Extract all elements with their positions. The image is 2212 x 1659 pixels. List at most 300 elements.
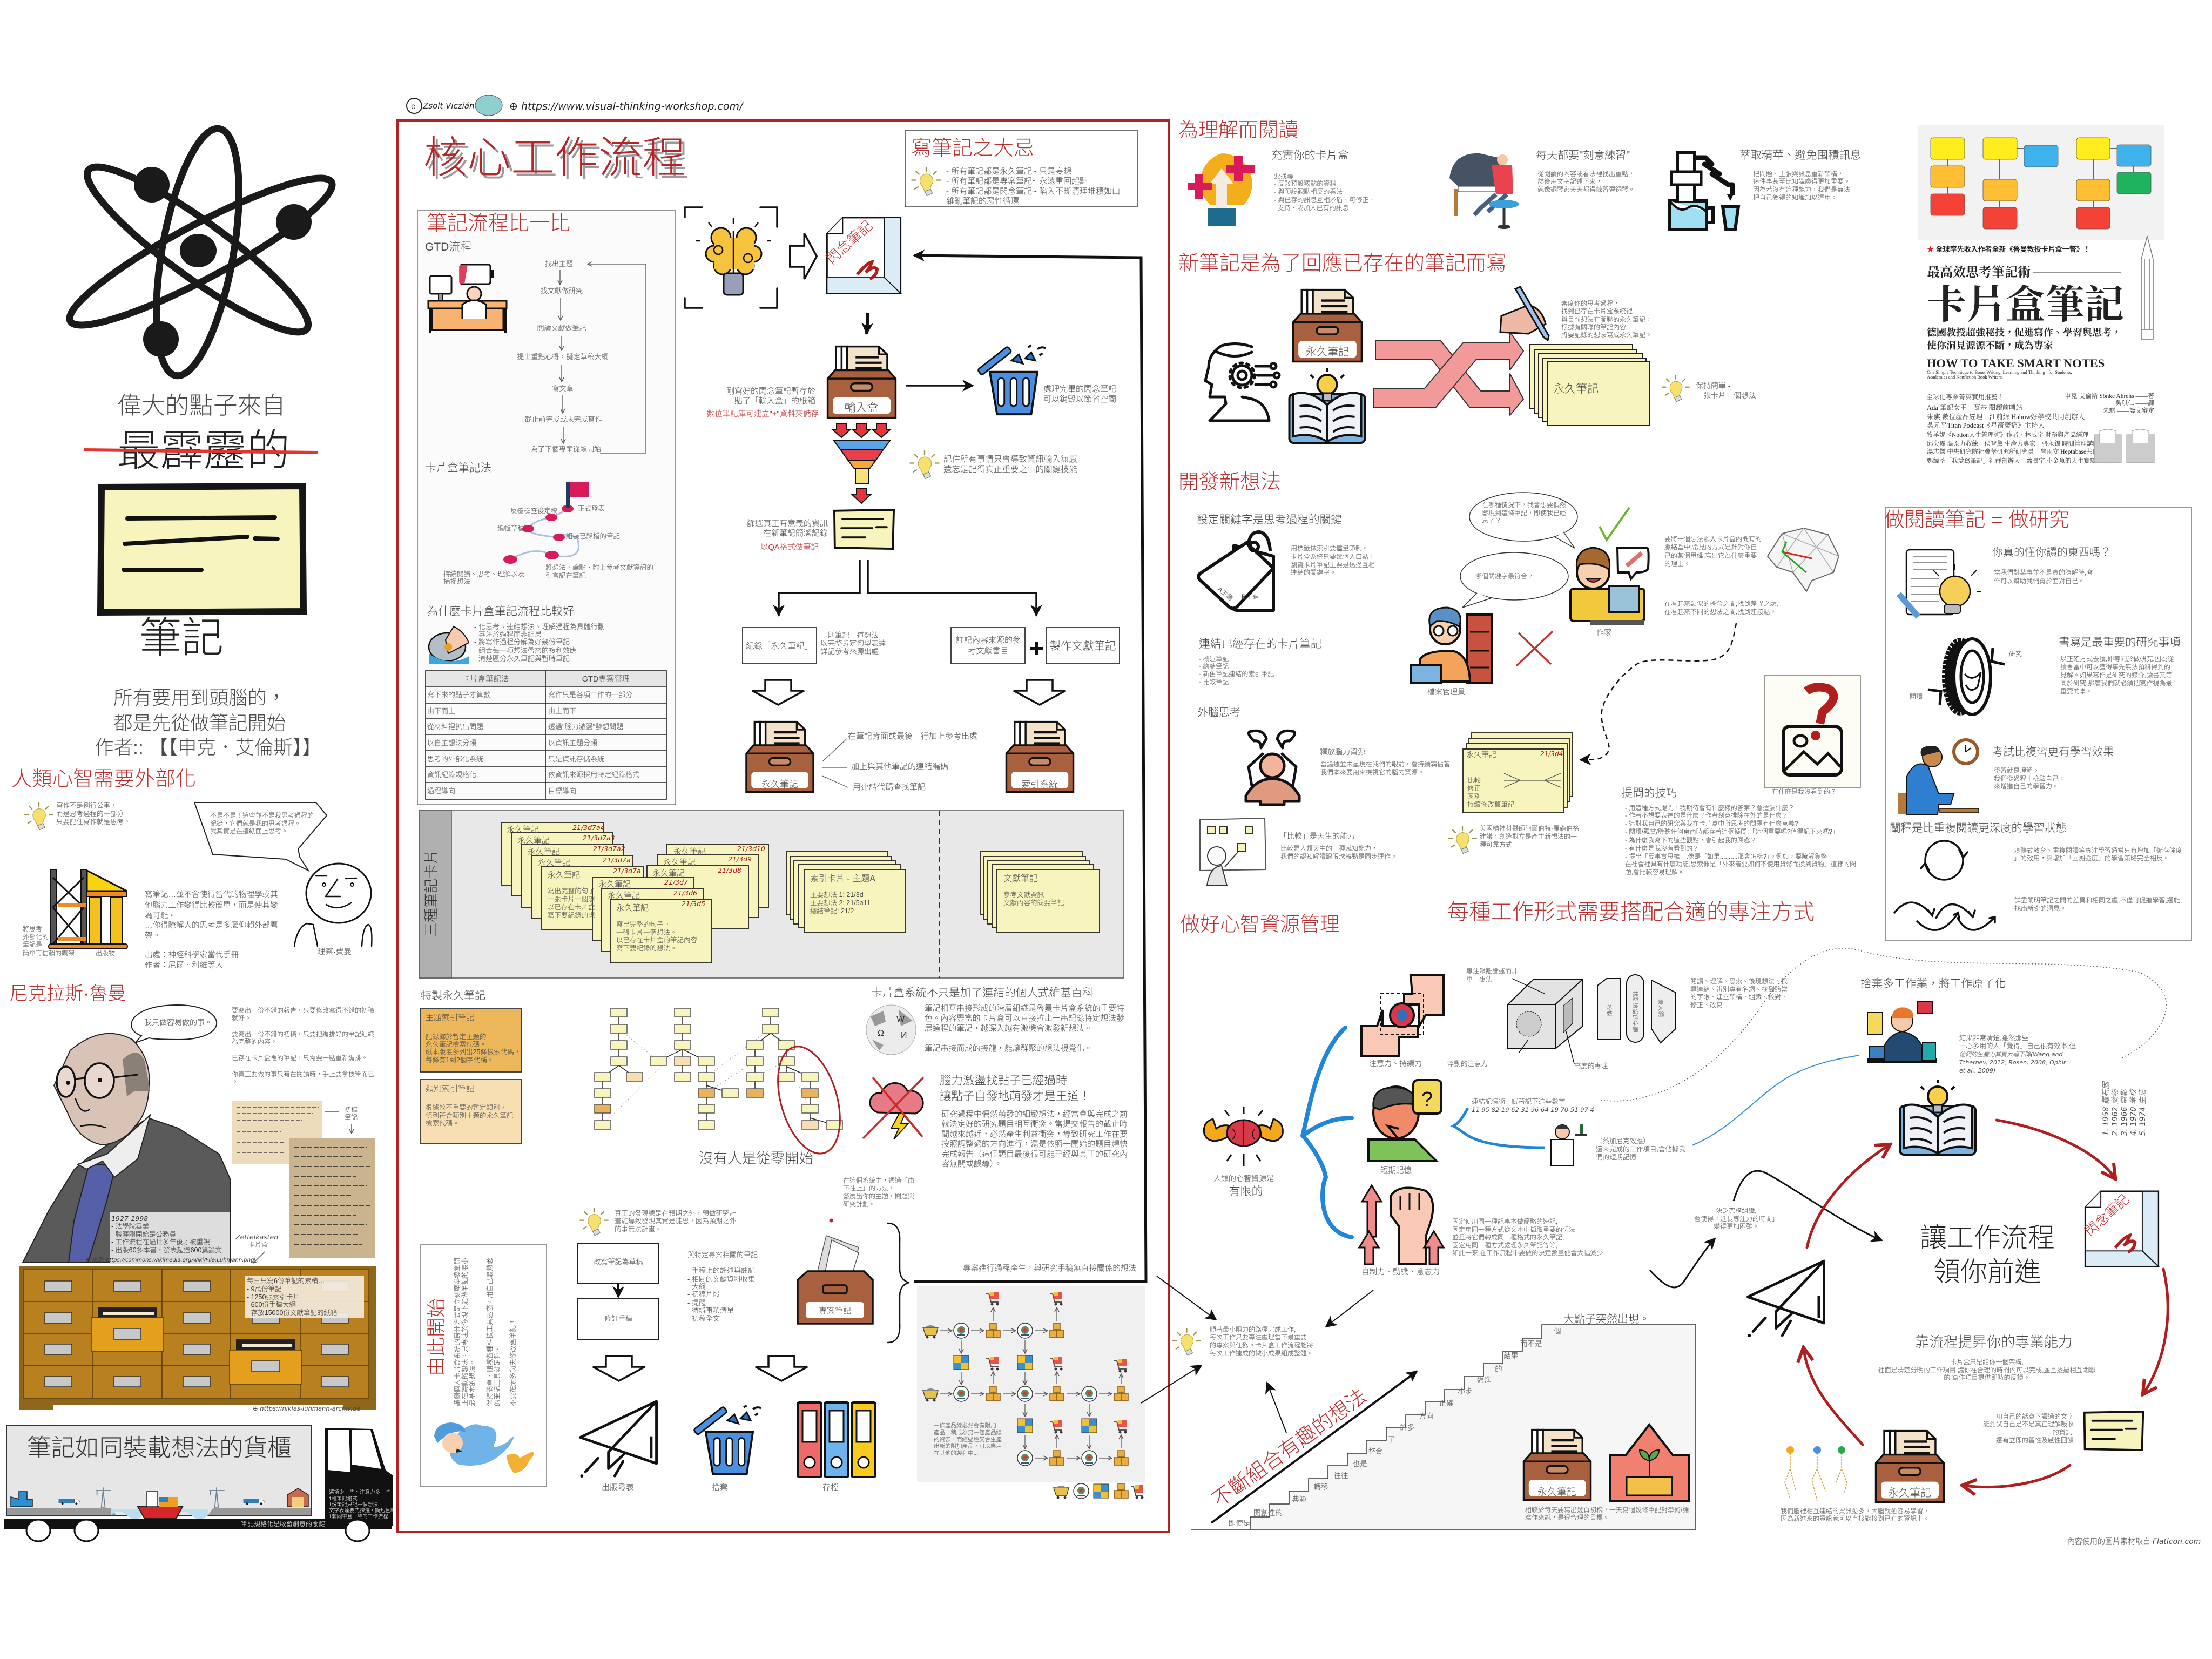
labels: research / reading: 研究 bbox=[2009, 650, 2022, 658]
chart: staircase to big idea bbox=[1191, 1313, 1696, 1529]
step labels: 轉移 bbox=[1313, 1483, 1328, 1491]
list: questions: - 作者不想要表達的是什麼？作者刻意排除在外的是什麼？ bbox=[1625, 812, 1788, 819]
list: questions: - 有什麼是我沒有看到的？ bbox=[1625, 845, 1699, 852]
english title bbox=[1927, 356, 2105, 380]
subheading: 充實你的卡片盒 bbox=[1271, 149, 1349, 161]
heading: 新筆記是為了回應已存在的筆記而寫 bbox=[1178, 252, 1507, 275]
tip: Albert Rothenberg: 建議，創造對立是產生新想法的一 bbox=[1480, 832, 1577, 840]
text: routine decisions: 並且將它們轉成同一種格式的永久筆記, bbox=[1452, 1233, 1564, 1241]
label: draft notes: 初稿 bbox=[345, 1106, 358, 1114]
portrait: Luhmann bbox=[23, 1034, 231, 1263]
diagram: by-products production line: 的資源，而經過種又會生產 bbox=[934, 1436, 1002, 1443]
caption: scaffold: 外部化的 bbox=[23, 933, 49, 941]
diagram: road to publication: 捕捉想法 bbox=[443, 578, 470, 585]
text: permanent note rule: 一則筆記一道想法 bbox=[820, 631, 879, 639]
icon: archivist bbox=[1411, 608, 1492, 683]
card stacks: permanent notes: 21/3d9 bbox=[728, 855, 752, 863]
illustration: filing cabinet bbox=[19, 1266, 376, 1410]
truck chassis bbox=[4, 1519, 392, 1541]
step box: record permanent note: 紀錄「永久筆記」 bbox=[746, 641, 813, 651]
icon: note and bulb bbox=[1899, 550, 1981, 617]
info box: archive stats: - 9萬份筆記 bbox=[247, 1285, 282, 1293]
label: self-control: 自制力、動機、意志力 bbox=[1361, 1267, 1440, 1277]
diagram: by-products production line: 產品，稍成為另一個產品線 bbox=[934, 1429, 1002, 1436]
step labels: 小步 bbox=[1458, 1387, 1472, 1395]
text: 來增進自己的學習力。 bbox=[1994, 782, 2059, 790]
recommenders: Ada 筆記女王 瓦基 閱讀前哨站 bbox=[1927, 403, 2022, 412]
text: tags: 連結的關鍵字。 bbox=[1291, 568, 1336, 576]
icon: book and bulb bbox=[1900, 1080, 1975, 1155]
card stack: index cards: 總結筆記: 21/2 bbox=[810, 907, 854, 915]
step labels: 正確 bbox=[1439, 1399, 1454, 1407]
heading: combine interesting ideas: 不斷組合有趣的想法 bbox=[1209, 1385, 1371, 1512]
table: zettelkasten vs GTD: 卡片盒筆記法 bbox=[462, 675, 509, 684]
icon: index system box: 索引系統 bbox=[1021, 779, 1058, 790]
authors: 朱騏 ——譯文審定 bbox=[2103, 407, 2154, 414]
caption: scaffold: 出版物 bbox=[96, 949, 115, 957]
text: study activities: 的字眼、建立架構、組織、校對、 bbox=[1690, 993, 1788, 1001]
text: 這件事甚至比知識廣得更加重要。 bbox=[1753, 177, 1850, 185]
text: lack of structure: 決乏架構組織, bbox=[1716, 1207, 1757, 1215]
text: 把問題、主張與訊息重新架構， bbox=[1753, 170, 1844, 178]
flow: draft to manuscript: 修訂手稿 bbox=[604, 1314, 632, 1323]
text: vertical list of years: 1. 1958 羅石固 bbox=[2102, 1081, 2110, 1136]
card stacks: permanent notes: 以已存在卡片盒的筆記內容 bbox=[616, 936, 697, 944]
text: writing quote: 寫筆記…並不會使得當代的物理學或其 bbox=[145, 890, 278, 899]
text: writing is thinking: 而是思考過程的一部分 bbox=[56, 810, 124, 818]
flow: draft to manuscript: 改寫筆記為草稿 bbox=[594, 1258, 643, 1266]
icon: bulb bbox=[25, 802, 53, 830]
card stack: literature notes: 文獻內容的簡要筆記 bbox=[1003, 899, 1064, 907]
icon: fleeting note: 閃念筆記 bbox=[823, 218, 875, 267]
text: free brain resources bbox=[1320, 747, 1450, 776]
subheading: 你真的懂你讀的東西嗎？ bbox=[1992, 546, 2111, 558]
text: writing quote: 他腦力工作變得比較簡單，而是使其變 bbox=[145, 901, 278, 910]
recommenders: 朱騏 數位產品經理 江前緯 Hahow好學校共同創辦人 bbox=[1927, 413, 2085, 421]
plus sign bbox=[1030, 642, 1043, 655]
truck cab: 1套同單且一致的工作流程 bbox=[329, 1513, 388, 1520]
card stacks: permanent notes: 21/3d5 bbox=[682, 900, 705, 908]
tip: small steps: 的專案與任務。卡片盒工作流程能將 bbox=[1210, 1341, 1313, 1349]
icon: permanent notes box: 永久筆記 bbox=[761, 779, 798, 790]
heading: 尼克拉斯·魯曼 bbox=[10, 983, 126, 1004]
heading: 做閱讀筆記 = 做研究 bbox=[1884, 508, 2069, 531]
text: trash note: 處理完畢的閃念筆記 bbox=[1043, 384, 1116, 394]
speech bubble: 紀錄，它們就是我的思考過程。 bbox=[210, 819, 301, 827]
credit line: Zsolt Viczián bbox=[422, 101, 475, 111]
diagram: coloured note boxes bbox=[1918, 125, 2164, 240]
diagram: note trees bbox=[595, 1008, 851, 1161]
table: zettelkasten vs GTD: GTD專案管理 bbox=[582, 675, 630, 684]
text: Zeigarnik effect: 還未完成的工作項目,會佔據我 bbox=[1596, 1145, 1685, 1153]
icon: pillars bbox=[1597, 975, 1676, 1043]
label: zettelkasten: Zettelkasten bbox=[235, 1233, 278, 1241]
icon: stressed head bbox=[1246, 731, 1299, 805]
table: zettelkasten vs GTD: 從材料裡扒出問題 bbox=[427, 723, 483, 731]
card: topic index note bbox=[420, 1009, 522, 1072]
text: writing quote: 為可能。 bbox=[145, 911, 176, 920]
card stack: index cards: 主要想法 2: 21/5a11 bbox=[810, 899, 871, 907]
text: wikipedia paragraph: 筆記串接而成的接龍，能讓群聚的想法視覺化。 bbox=[925, 1044, 1092, 1053]
text: framework: 卡片盒只是給你一個架構, bbox=[1950, 1358, 2024, 1366]
text: writing quote: 出處：神經科學家當代手冊 bbox=[145, 950, 239, 960]
card stacks: permanent notes: 永久筆記 bbox=[616, 903, 649, 913]
text: writing process: 將要記錄的想法寫成永久筆記。 bbox=[1561, 331, 1652, 339]
text: lack of structure: 會使得「延長專注力的時間」 bbox=[1694, 1215, 1778, 1223]
card stacks: permanent notes: 21/3d7a4 bbox=[572, 824, 605, 832]
subheading: 書寫是最重要的研究事項 bbox=[2059, 636, 2181, 649]
icon: head with gear bbox=[1205, 343, 1279, 421]
icon: fleeting note bbox=[823, 218, 901, 293]
info box: life facts: 1927-1998 bbox=[111, 1215, 148, 1223]
card stacks: permanent notes: 21/3d7 bbox=[664, 878, 688, 886]
caption: scaffold: 簡單可信賴的鷹架 bbox=[23, 949, 75, 957]
icon: permanent notes box bbox=[1293, 290, 1361, 362]
step box: note the sources bbox=[951, 628, 1025, 664]
list: project notes: - 大綱 bbox=[687, 1283, 706, 1291]
card stacks: permanent notes: 永久筆記 bbox=[528, 847, 560, 857]
card stacks: permanent notes: 永久筆記 bbox=[663, 858, 696, 867]
flow: draft to manuscript bbox=[578, 1243, 659, 1339]
text: focus on argument: 單一想法 bbox=[1466, 975, 1492, 983]
heading: great ideas come from: 偉大的點子來自 bbox=[117, 393, 286, 419]
text: lack of structure: 變得更加困難。 bbox=[1714, 1223, 1759, 1230]
icon: wikipedia globe bbox=[866, 1005, 916, 1055]
text: bottom-up note: 在這個系統中，透過「由 bbox=[843, 1176, 914, 1184]
table: zettelkasten vs GTD: 寫下來的點子才算數 bbox=[427, 691, 490, 699]
text: limited resources bbox=[1213, 1174, 1274, 1198]
panel: reading notes = research bbox=[1884, 507, 2191, 941]
icon: trash discard: 捨棄 bbox=[712, 1483, 728, 1492]
arrow: diagonal staircase bbox=[1211, 1371, 1417, 1523]
text: free brain resources: 我們本來要用來檢視它的腦力資源。 bbox=[1320, 768, 1424, 776]
credit line bbox=[407, 95, 744, 116]
icon: growth bbox=[1610, 1425, 1689, 1501]
card stack bbox=[1530, 345, 1650, 426]
flow: GTD steps: 閱讀文獻做筆記 bbox=[537, 324, 586, 332]
book subtitle: 最高效思考筆記術 bbox=[1927, 265, 2031, 280]
caption: big idea: 大點子突然出現。 bbox=[1563, 1313, 1650, 1325]
text: elaboration: 找出新奇的洞見。 bbox=[2014, 904, 2066, 912]
flow: GTD steps: 提出重點心得，擬定草稿大綱 bbox=[517, 353, 609, 361]
tip: forgetting bbox=[910, 450, 1078, 479]
info box: life facts: ⊕ 來源: https://commons.wikimedia.org/wiki/File:Luhmann.png bbox=[85, 1257, 254, 1263]
step labels: 方向 bbox=[1419, 1412, 1433, 1420]
text: own words: 能測試自己是不是真正理解吸收 bbox=[1983, 1420, 2074, 1428]
icon: atom bbox=[58, 123, 344, 382]
arrow: to archive bbox=[756, 1356, 807, 1381]
card stack: compare notes: 永久筆記 bbox=[1466, 750, 1496, 759]
text: 見解。如果寫作是研究的媒介,讀書又等 bbox=[2060, 671, 2172, 679]
text: vertical list of years: 3. 1966 電影 bbox=[2120, 1088, 2129, 1136]
arrow: feedback loop bbox=[914, 255, 1146, 1282]
section: mental resources mind map bbox=[1204, 948, 2166, 1277]
speech bubble: which moment: 在哪種情況下，我會想要偶然 bbox=[1482, 501, 1566, 509]
caption: scaffold: 將思考 bbox=[23, 925, 42, 933]
authors: 申克·艾倫斯 Sönke Ahrens ——著 bbox=[2065, 392, 2154, 400]
text: research paragraph: 按照調整過的方向進行，還是依照一開始的題目趕快 bbox=[941, 1139, 1128, 1149]
panel: Niklas Luhmann bbox=[10, 983, 376, 1412]
step box: record permanent note bbox=[743, 628, 817, 664]
recommenders bbox=[1926, 393, 2117, 464]
icon: rotating coin bbox=[1928, 639, 2005, 714]
label: zettelkasten: 卡片盒 bbox=[248, 1241, 268, 1249]
icon: elaboration waves bbox=[1894, 902, 1995, 930]
tip: Albert Rothenberg: 種可靠方式 bbox=[1480, 841, 1512, 848]
table: zettelkasten vs GTD: 寫作只是各項工作的一部分 bbox=[548, 691, 632, 699]
text: writing process: 與目前想法有關聯的永久筆記， bbox=[1561, 315, 1652, 323]
icon: distillation bbox=[1670, 152, 1738, 230]
table: zettelkasten vs GTD: 以資訊主題分類 bbox=[548, 739, 597, 747]
icon: question image bbox=[1764, 676, 1860, 787]
speech bubble: which moment: 發現到這條筆記，即使我已經 bbox=[1482, 509, 1566, 517]
text: focus on argument: 專注聚離論述而非 bbox=[1466, 967, 1518, 975]
card stack: compare notes bbox=[1463, 733, 1573, 813]
card: category index note: 根據較不重要的暫定類別， bbox=[426, 1103, 507, 1111]
curve arrow: deferred focus bbox=[1650, 1171, 1882, 1287]
text: reasons: - 將寫作過程分解為好幾份筆記 bbox=[474, 638, 570, 646]
diagram: road to publication: 編輯草稿 bbox=[497, 525, 524, 532]
text: own words: 的資訊, bbox=[2053, 1428, 2074, 1436]
arrows: workflow cycle bbox=[1804, 1120, 2168, 1487]
table: zettelkasten vs GTD: 透過"腦力激盪"發想問題 bbox=[548, 723, 623, 731]
text: routine decisions: 固定用同一種方式處理永久筆記等等, bbox=[1452, 1241, 1557, 1249]
card stacks: permanent notes: 永久筆記 bbox=[538, 858, 570, 867]
text: 當我們對某事並不是真的瞭解時,寫 bbox=[1994, 568, 2093, 576]
tip: Albert Rothenberg bbox=[1448, 824, 1579, 854]
text: framework: 的 寫作項目提供即時的反饋。 bbox=[1944, 1373, 2030, 1381]
icon: book and bulb bbox=[1290, 368, 1365, 443]
arrows: crossing pink bbox=[1373, 332, 1523, 415]
icon: wikipedia globe: W bbox=[896, 1015, 905, 1024]
text: own words: 用自己的話寫下讀過的文字 bbox=[1996, 1412, 2074, 1420]
text: filter note: 篩選真正有意義的資訊 bbox=[747, 519, 828, 528]
text: study activities: 閱讀、理解、思索、後現想法、找 bbox=[1690, 977, 1788, 985]
arrow: inbox to trash bbox=[906, 385, 973, 387]
text: filter note: 在新筆記簡潔記錄 bbox=[763, 529, 828, 538]
speech bubble: 不是不是！這些並不是我思考過程的 bbox=[210, 811, 314, 819]
english title: Academics and Nonfiction Book Writers. bbox=[1927, 374, 2003, 380]
section: let the workflow lead you bbox=[1748, 977, 2168, 1522]
callout: taboo of note taking: - 所有筆記都是永久筆記~ 只是妄想 bbox=[946, 167, 1071, 176]
text: filter note bbox=[747, 519, 828, 552]
icon: permanent notes box: 永久筆記 bbox=[1537, 1487, 1576, 1498]
text: linked info: 我們腦裡相互連結的資訊愈多，大腦就愈容易學習， bbox=[1781, 1507, 1930, 1515]
text: comparing is innate: 比較是人類天生的一種感知能力， bbox=[1280, 844, 1378, 852]
callouts: permanent note details: 在筆記背面或最後一行加上參考出處 bbox=[848, 732, 977, 741]
card stacks: permanent notes: 21/3d7a1 bbox=[603, 856, 635, 864]
icon: hand writing bbox=[1500, 287, 1549, 340]
text: reasons: - 化思考、連結想法、理解過程為具體行動 bbox=[474, 623, 605, 631]
tip: keep simple: 一張卡片一個想法 bbox=[1696, 391, 1756, 400]
tip: small steps bbox=[1173, 1325, 1313, 1357]
panel: core workflow bbox=[397, 120, 1169, 1532]
vertical text: 讓劇個人卡片盒系統的最佳方式是立刻摩拳擦掌開 bbox=[453, 1258, 461, 1406]
speech bubble bbox=[194, 802, 327, 871]
list: project notes: - 手稿上的評述與註記 bbox=[687, 1266, 755, 1274]
labels: tags: A主題 bbox=[1216, 585, 1235, 602]
icon: trash bbox=[977, 346, 1046, 414]
text: comparing is innate: 「比較」是天生的能力 bbox=[1279, 832, 1355, 840]
icon: project notes box bbox=[798, 1218, 873, 1324]
diagram: road to publication: 正式發表 bbox=[578, 505, 605, 512]
subheading: zettelkasten method: 卡片盒筆記法 bbox=[425, 462, 491, 474]
speech bubble bbox=[131, 1005, 217, 1043]
tip: small steps: 順著最小阻力的路徑完成工作, bbox=[1210, 1325, 1296, 1333]
table: zettelkasten vs GTD: 由下而上 bbox=[427, 707, 455, 715]
truck cab bbox=[325, 1428, 401, 1526]
link: dotted to multitasking panel bbox=[1601, 948, 2166, 1101]
tip: forgetting: 遺忘是記得真正重要之事的關鍵技能 bbox=[943, 464, 1077, 474]
icon: person at board bbox=[1200, 818, 1266, 886]
card stacks: permanent notes: 寫出完整的句子 bbox=[548, 887, 595, 895]
footer: image credit: 內容使用的圖片素材取自 Flaticon.com bbox=[2067, 1537, 2201, 1546]
icon: tags bbox=[1198, 532, 1273, 610]
text: 讀書當中可以獲得事先無法預料得到的 bbox=[2060, 663, 2170, 671]
source link: ⊕ https://niklas-luhmann-archiv.de bbox=[253, 1405, 360, 1412]
text: only do easy things: 你真正要做的事只有在閱讀時，手上要拿枝筆而已 bbox=[232, 1070, 374, 1078]
table: zettelkasten vs GTD bbox=[426, 671, 666, 799]
icon: publisher marks bbox=[2094, 429, 2154, 463]
list: project notes: - 提醒 bbox=[687, 1299, 706, 1307]
text: only do easy things: 要寫出一份不錯的初稿，只要把編排好的筆記組織 bbox=[232, 1030, 374, 1038]
icon: pillars: 校對 bbox=[1606, 1004, 1613, 1016]
card: topic index note: 每條有1到2個字代稱。 bbox=[426, 1056, 494, 1064]
info box: life facts: - 工作流程在過世多年後才被重視 bbox=[111, 1238, 210, 1246]
step labels: 即使是 bbox=[1229, 1519, 1250, 1527]
callout: taboo of note taking: - 所有筆記都是專案筆記~ 永遠重回起點 bbox=[946, 177, 1088, 186]
subheading: 考試比複習更有學習效果 bbox=[1992, 746, 2114, 758]
icon: tired person at desk bbox=[428, 265, 507, 333]
tip: keep simple bbox=[1662, 375, 1756, 402]
table: zettelkasten vs GTD: 目標導向 bbox=[548, 787, 576, 795]
portrait: Feynman: 理察·費曼 bbox=[318, 947, 352, 956]
text: research paragraph: 容無關或誤導）。 bbox=[941, 1159, 1002, 1169]
subheading: why zettelkasten: 為什麼卡片盒筆記流程比較好 bbox=[427, 605, 574, 618]
book description: 德國教授超強秘技，促進寫作、學習與思考， bbox=[1927, 327, 2121, 338]
diagram: road to publication: 反覆檢查後定稿 bbox=[510, 507, 558, 515]
text: routine decisions: 固定用同一種方式從文本中擷取重要的想法 bbox=[1452, 1225, 1575, 1233]
callouts: permanent note details bbox=[822, 732, 977, 792]
subheading: 闡釋是比重複閱讀更深度的學習狀態 bbox=[1890, 822, 2067, 834]
caption: project ideas: 專案進行過程產生，與研究手稿無直接關係的想法 bbox=[963, 1263, 1136, 1273]
text: inbox note: 剛寫好的閃念筆記暫存於 bbox=[726, 386, 815, 396]
diagram: by-products production line: 一條產品線必然會有附加 bbox=[934, 1422, 996, 1429]
card stacks: permanent notes: 一張卡片一個想 bbox=[548, 895, 595, 903]
card: topic index note: 紙本版最多列出25條檢索代碼， bbox=[426, 1048, 521, 1056]
icon: crossed brainstorm bbox=[863, 1077, 923, 1139]
icon: permanent notes box bbox=[746, 722, 813, 792]
authors bbox=[2065, 392, 2154, 414]
table: zettelkasten vs GTD: 資訊紀錄規格化 bbox=[427, 771, 476, 779]
text: - 與已存的訊息互相矛盾、可修正、 bbox=[1274, 195, 1375, 204]
book description bbox=[1927, 327, 2121, 351]
label: draft notes bbox=[325, 1106, 358, 1133]
text: elaboration: 詳盡闡明筆記之間的差異和相同之處,不僅可促進學習,還能 bbox=[2014, 896, 2180, 904]
text: 我們從過程中檢驗自己， bbox=[1994, 775, 2065, 783]
icon: big yellow note bbox=[100, 486, 304, 612]
text: vertical list of years: 5. 1974 生活 bbox=[2139, 1088, 2147, 1136]
text: mnemonic numbers: 11 95 82 19 62 31 96 64 19 70 51 97 4 bbox=[1472, 1106, 1594, 1114]
text: routine decisions: 固定使用同一種記事本做簡略的速記, bbox=[1452, 1217, 1557, 1225]
english title: HOW TO TAKE SMART NOTES bbox=[1927, 356, 2105, 370]
text: own words: 還有立即的習性及感性回饋 bbox=[1996, 1436, 2074, 1444]
heading: brainstorming outdated: 讓點子自發地萌發才是王道！ bbox=[940, 1090, 1091, 1103]
text: rehearsal: 」的效用，與增加「回溯強度」的學習策略完全相反。 bbox=[2014, 854, 2169, 862]
diagram: road to publication: 組裝已歸檔的筆記 bbox=[566, 532, 620, 540]
tip: small steps: 每次工作達成的微小成果組成整體。 bbox=[1210, 1349, 1313, 1357]
label: draft notes: 筆記 bbox=[345, 1113, 358, 1121]
brace bbox=[888, 1223, 909, 1343]
card: category index note: 類別索引筆記 bbox=[426, 1084, 474, 1094]
step box: literature note bbox=[1046, 628, 1120, 664]
recommenders: 鄭緯荃「我愛寫筆記」社群創辦人 蕭景宇 小金魚的人生實驗室主筆 bbox=[1927, 457, 2115, 464]
icon: small note bbox=[2085, 1412, 2143, 1450]
icon: wikipedia globe: И bbox=[901, 1031, 907, 1040]
section: develop new ideas bbox=[1178, 471, 1860, 886]
diagram: road to publication: 將想法、論點、附上參考文獻資訊的 bbox=[545, 563, 653, 571]
section: new notes respond to existing notes bbox=[1178, 252, 1756, 443]
text: 把自己獲得的知識加以運用。 bbox=[1753, 193, 1837, 201]
subheading: links: 連結已經存在的卡片筆記 bbox=[1199, 638, 1322, 650]
icon: paper plane publish: 出版發表 bbox=[602, 1483, 634, 1492]
speech bubble: 我其實是在這紙面上思考。 bbox=[210, 827, 288, 835]
list: questions: 題,會比較容易理解。 bbox=[1625, 868, 1684, 876]
flow: GTD steps: 找出主題 bbox=[545, 260, 573, 268]
text: multitasking research: 一心多用的人「覺得」自己很有效率,但 bbox=[1959, 1042, 2076, 1050]
portrait: Feynman bbox=[294, 864, 372, 956]
info box: archive stats bbox=[245, 1276, 364, 1318]
flow: GTD steps: 為了下個專案從頭開始 bbox=[531, 445, 601, 453]
labels: tags bbox=[1216, 585, 1259, 602]
text block: book quote and author: 作者:: 【【申克．艾倫斯】】 bbox=[95, 737, 321, 758]
text: study activities: 修正、改寫 bbox=[1690, 1001, 1723, 1009]
step labels: 典範 bbox=[1292, 1495, 1307, 1503]
info box: archive stats: - 存放15000份文獻筆記的紙箱 bbox=[247, 1309, 337, 1317]
step labels: 了 bbox=[1388, 1435, 1395, 1444]
card stacks: permanent notes: 21/3d10 bbox=[737, 845, 765, 853]
text: wikipedia paragraph: 色。內容豐富的卡片盒可以直接拉出一串記錄特定想法發 bbox=[925, 1014, 1124, 1023]
heading: notes: 筆記 bbox=[139, 614, 224, 662]
text: limited resources: 有限的 bbox=[1229, 1185, 1263, 1198]
tip: discoveries are unplanned: 真正的發現總是在預期之外，預做研究計 bbox=[615, 1209, 736, 1217]
text: tags: 瀏覽卡片筆記主要是透過互相 bbox=[1291, 561, 1375, 569]
text: writing is thinking: 只要記住寫作就是思考。 bbox=[56, 818, 131, 826]
labels: focus: 注意力、持續力 bbox=[1369, 1059, 1422, 1068]
list: questions: - 為什麼我寫下的這些觀點，會引起我的興趣？ bbox=[1625, 837, 1756, 844]
text: embedding ideas: 在看起來不同的想法之間,找到連接點。 bbox=[1664, 608, 1776, 616]
text: 就像鋼琴家天天都得練習彈鋼琴。 bbox=[1537, 186, 1635, 193]
text: permanent note rule: 詳記參考來源出處 bbox=[820, 648, 879, 656]
icon: permanent notes box: 永久筆記 bbox=[1306, 346, 1349, 358]
icon: pianist bbox=[1449, 153, 1519, 229]
icon: permanent notes box bbox=[1523, 1430, 1591, 1500]
card: category index note: 檢索代碼。 bbox=[426, 1120, 460, 1127]
text: only do easy things: 。 bbox=[232, 1078, 238, 1085]
text: only do easy things: 就好。 bbox=[232, 1014, 251, 1022]
diagram: by-products production line bbox=[917, 1286, 1145, 1499]
text: permanent note rule: 以完整肯定句型表達 bbox=[820, 639, 886, 648]
info box: archive stats: 每日只寫6份筆記的累積… bbox=[247, 1277, 325, 1285]
text: multitasking research: Tchernev, 2012; Rosen, 2008; Ophir bbox=[1959, 1059, 2067, 1066]
text: research paragraph: 就決定好的研究題目相互衝突。當提交報告的截止時 bbox=[941, 1120, 1128, 1129]
text: 然後用文字記述下來， bbox=[1537, 177, 1602, 185]
arrow: dashed to cards bbox=[1580, 623, 1736, 760]
heading with shadow: 核心工作流程 bbox=[427, 137, 689, 186]
text: filter note: 以QA格式做筆記 bbox=[760, 543, 819, 552]
tip: small steps: 每次工作只要專注處理當下最重要 bbox=[1210, 1333, 1307, 1341]
heading: manage mental resources: 做好心智資源管理 bbox=[1180, 913, 1340, 935]
